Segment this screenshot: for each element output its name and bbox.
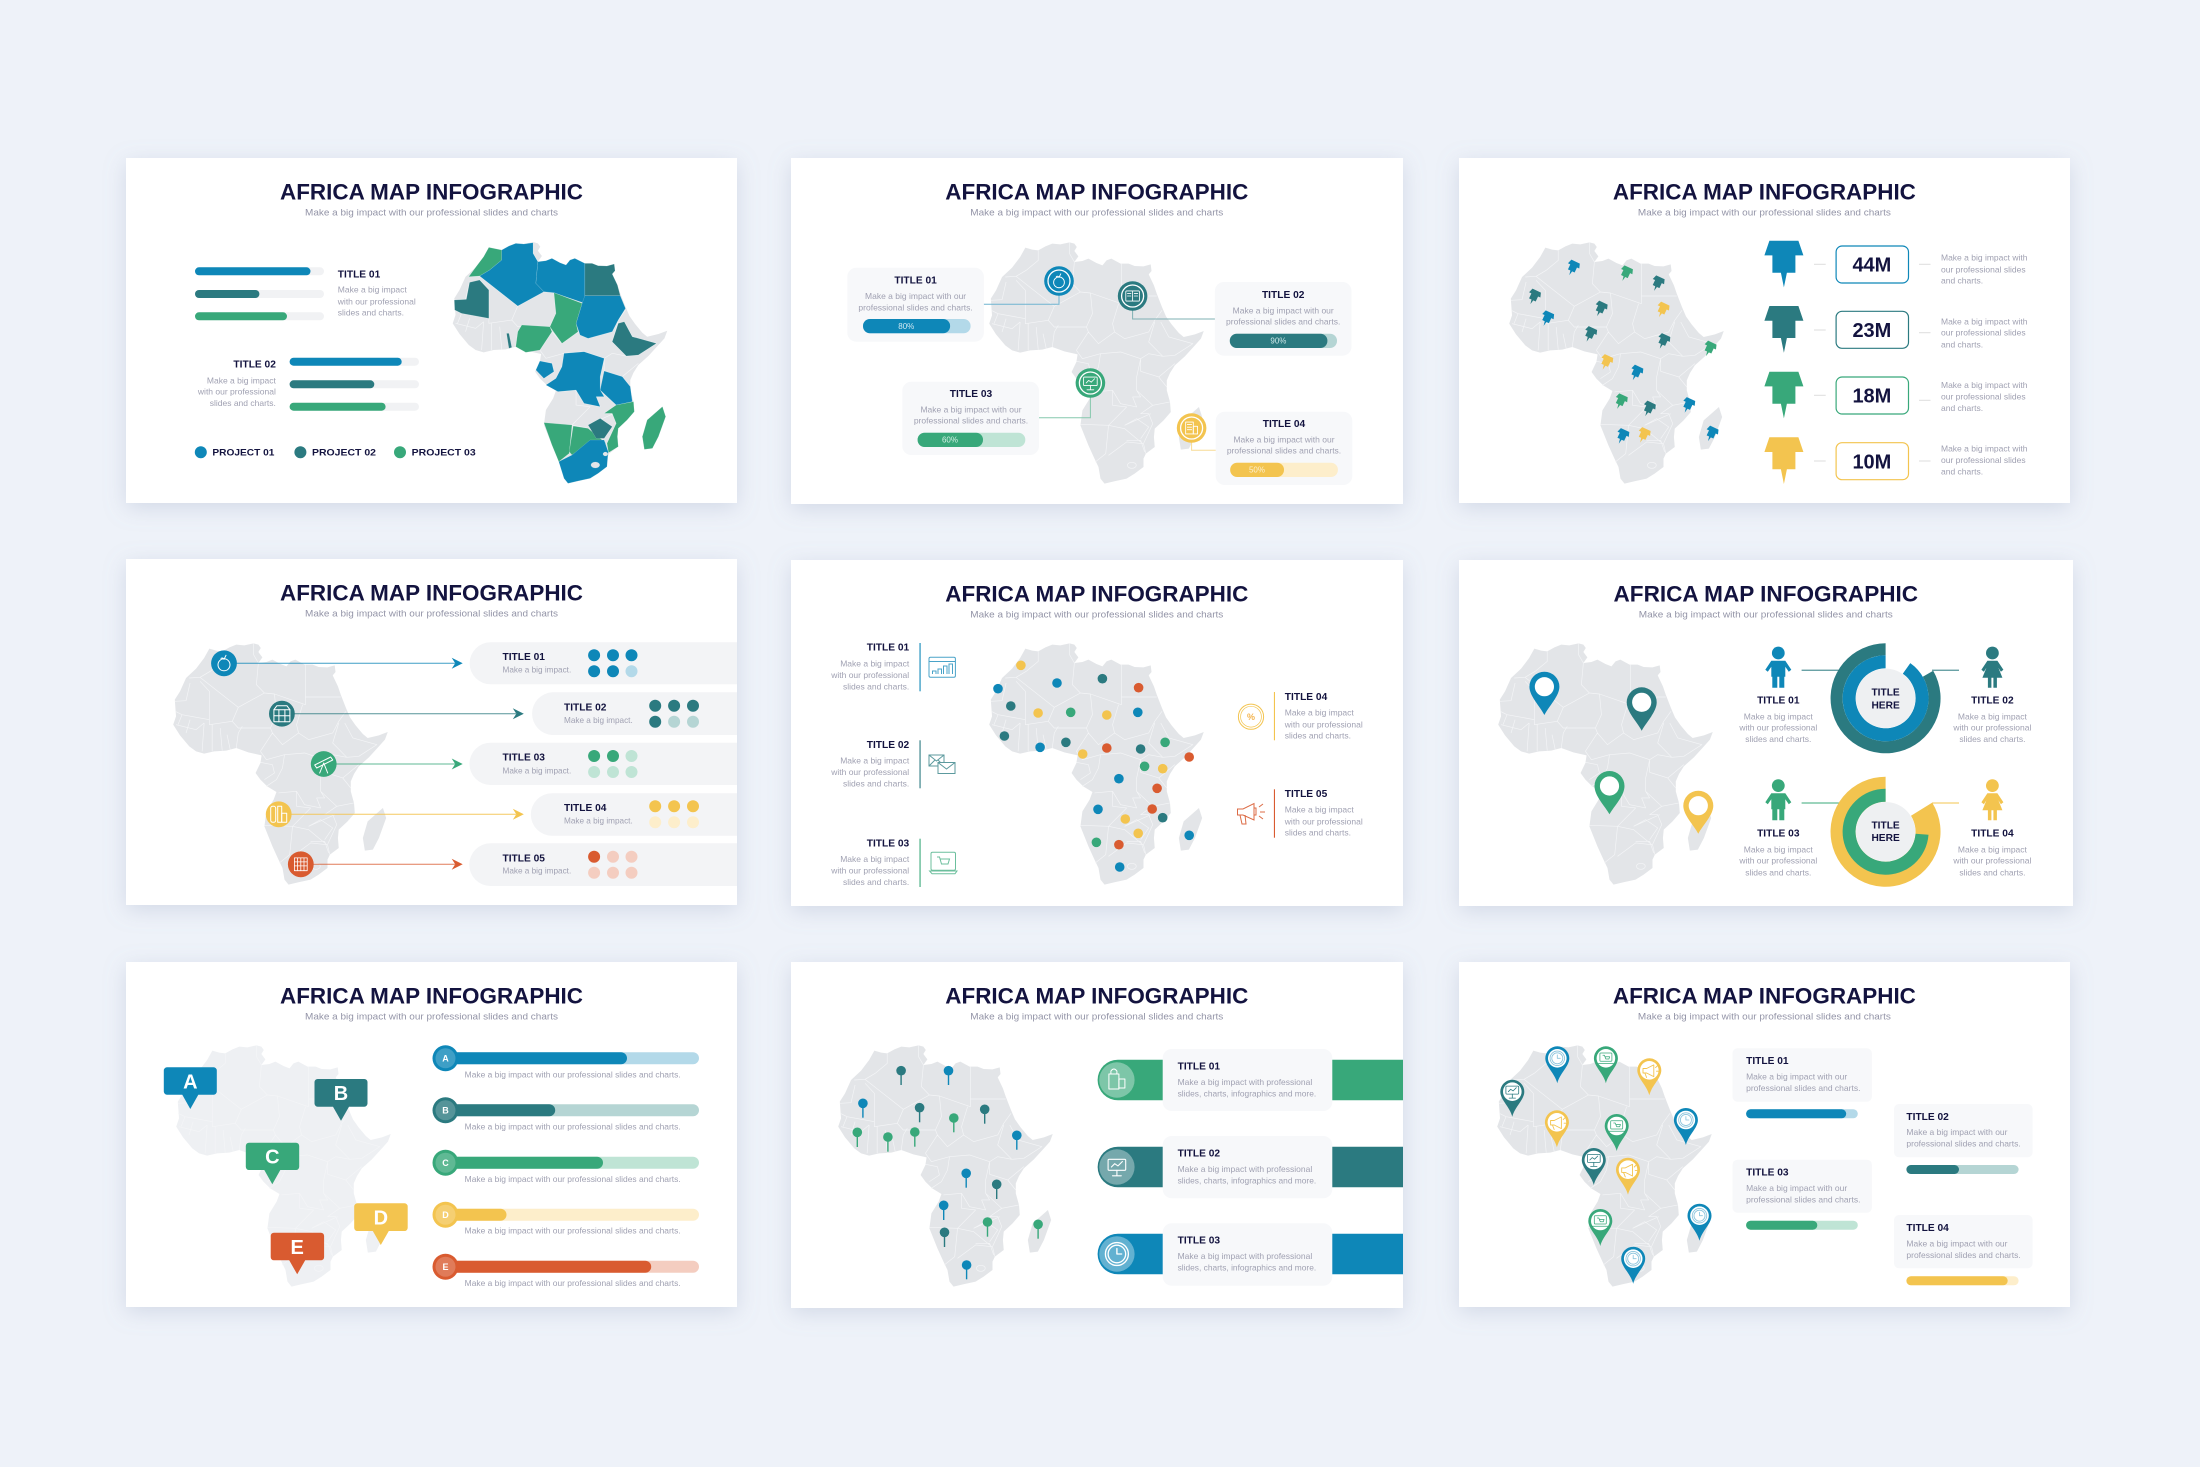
person: title 02: [1952, 647, 2031, 744]
row: 23M: [1764, 306, 2028, 353]
map: [176, 1045, 391, 1287]
bar: B: Make a big impact with our professional slides and charts.: [465, 1122, 681, 1131]
row: 10M: [1764, 437, 2028, 484]
row: 10M: and charts.: [1941, 466, 1983, 476]
band: title 01: Make a big impact with professional: [1178, 1077, 1312, 1087]
person: title 04: [1952, 779, 2031, 877]
note: title 03: slides and charts.: [843, 877, 909, 887]
pill: title 01: [470, 642, 737, 684]
callout: C: [246, 1143, 299, 1184]
card: title 04: professional slides and charts.: [1906, 1250, 2021, 1260]
card: title 02: TITLE 02: [1906, 1112, 1949, 1123]
card: title 03: Make a big impact with our: [1746, 1183, 1847, 1193]
callout: A: [164, 1067, 217, 1109]
note: title 05: with our professional: [1284, 816, 1363, 826]
donut chart: top: [1831, 643, 1941, 753]
person: title 04: Make a big impact: [1958, 844, 2028, 854]
person: title 04: slides and charts.: [1959, 867, 2025, 877]
subheading: Make a big impact with our professional slides and charts: [1638, 1012, 1891, 1023]
text: title 01: TITLE 01: [338, 270, 381, 281]
row: 44M: Make a big impact with: [1941, 253, 2028, 263]
icon: bar chart window: [929, 657, 955, 677]
note: title 02: slides and charts.: [843, 779, 909, 789]
subheading: Make a big impact with our professional slides and charts: [1638, 208, 1891, 218]
person: title 01: Make a big impact: [1744, 711, 1813, 721]
map dots: [993, 660, 1194, 872]
heading: AFRICA MAP INFOGRAPHIC: [1613, 984, 1916, 1009]
heading: AFRICA MAP INFOGRAPHIC: [1613, 180, 1916, 204]
card: title 04: 50%: [1249, 466, 1265, 474]
note: title 03: Make a big impact: [840, 854, 910, 864]
text: title 01: with our professional: [337, 296, 416, 306]
subheading: Make a big impact with our professional slides and charts: [305, 208, 558, 218]
card: title 01: [847, 268, 984, 342]
row: 44M: our professional slides: [1941, 264, 2026, 274]
person: title 03: [1738, 779, 1817, 877]
card: title 03: [1732, 1160, 1872, 1230]
heading: AFRICA MAP INFOGRAPHIC: [280, 180, 583, 204]
person: title 03: with our professional: [1738, 856, 1817, 866]
row: 18M: [1764, 372, 2028, 418]
pill: title 05: Make a big impact.: [502, 867, 571, 876]
marker: apple with connector: [984, 266, 1074, 304]
arrow and icon: abacus: [288, 851, 463, 877]
legend: PROJECT 01: [212, 448, 274, 458]
subheading: Make a big impact with our professional slides and charts: [970, 208, 1223, 218]
callout: B: [314, 1079, 368, 1121]
text: title 02: with our professional: [197, 387, 276, 397]
callout: D: D: [374, 1208, 388, 1230]
arrow and icon: telescope: [311, 751, 463, 777]
note: title 03: TITLE 03: [867, 838, 910, 849]
panel: slide 8, needle pins with banded cards: [791, 962, 1403, 1308]
card: title 04: TITLE 04: [1263, 419, 1306, 430]
text: title 02: slides and charts.: [210, 398, 276, 408]
row: 23M: our professional slides: [1941, 328, 2026, 338]
card: title 04: [1216, 412, 1352, 485]
marker: board with connector: [1039, 368, 1105, 418]
map: [989, 643, 1204, 885]
bar: A: Make a big impact with our professional slides and charts.: [465, 1070, 681, 1079]
pill: title 02: Make a big impact.: [564, 716, 633, 725]
map: [1509, 242, 1724, 484]
subheading: Make a big impact with our professional slides and charts: [1639, 610, 1893, 620]
text: title 01: [337, 270, 416, 318]
row: 18M: our professional slides: [1941, 391, 2026, 401]
donut chart: top: HERE: [1871, 700, 1900, 711]
arrow and icon: box: [269, 701, 524, 727]
row: 44M: [1764, 241, 2028, 287]
pill: title 03: TITLE 03: [502, 753, 545, 764]
map: [989, 242, 1204, 484]
card: title 01: professional slides and charts.: [858, 302, 973, 312]
subheading: Make a big impact with our professional slides and charts: [305, 1012, 558, 1023]
bar: D: D: [442, 1210, 449, 1220]
card: title 01: 80%: [898, 322, 914, 331]
subheading: Make a big impact with our professional slides and charts: [305, 608, 558, 620]
note: title 04: Make a big impact: [1285, 708, 1354, 718]
row: 44M: 44M: [1852, 255, 1891, 277]
band: title 01: TITLE 01: [1178, 1061, 1220, 1072]
pill: title 02: [532, 692, 737, 735]
callout: E: E: [291, 1237, 304, 1259]
person: title 04: TITLE 04: [1971, 829, 2014, 840]
band: title 02: slides, charts, infographics and more.: [1178, 1176, 1316, 1186]
row: 23M: 23M: [1852, 320, 1891, 342]
map: [173, 643, 388, 885]
note: title 02: [830, 740, 921, 789]
legend: [195, 446, 476, 458]
panel: slide 2, callout cards on map: [791, 158, 1403, 504]
panel: slide 1, coloured project map: [126, 158, 737, 503]
bar: D: Make a big impact with our professional slides and charts.: [465, 1227, 681, 1236]
map: [1498, 643, 1713, 885]
panel: slide 9, icon teardrop pins with cards: [1459, 962, 2070, 1307]
person: title 01: slides and charts.: [1745, 734, 1811, 744]
person: title 02: TITLE 02: [1971, 696, 2014, 707]
callout: A: A: [183, 1071, 198, 1093]
card: title 02: Make a big impact with our: [1233, 305, 1334, 315]
marker: book with connector: [1118, 281, 1215, 319]
band: title 02: [1098, 1136, 1403, 1198]
person: title 02: with our professional: [1952, 723, 2031, 733]
map: [1497, 1045, 1712, 1287]
note: title 05: Make a big impact: [1285, 805, 1354, 815]
note: title 04: TITLE 04: [1285, 692, 1328, 703]
card: title 04: [1894, 1215, 2033, 1285]
pill: title 01: TITLE 01: [502, 652, 545, 663]
bar: B: B: [442, 1106, 449, 1116]
person: title 01: [1738, 647, 1817, 744]
bar: E: E: [442, 1262, 449, 1272]
note: title 05: slides and charts.: [1285, 828, 1351, 838]
card: title 02: professional slides and charts.: [1906, 1139, 2021, 1149]
heading: AFRICA MAP INFOGRAPHIC: [945, 180, 1248, 204]
arrow and icon: bottles: [266, 801, 524, 827]
note: title 01: [830, 643, 921, 691]
bar: E: [432, 1254, 699, 1288]
card: title 01: TITLE 01: [894, 275, 937, 286]
note: title 02: Make a big impact: [840, 756, 910, 766]
card: title 02: [1215, 282, 1352, 356]
card: title 04: professional slides and charts.: [1227, 446, 1341, 456]
bar: A: A: [442, 1054, 449, 1064]
card: title 04: TITLE 04: [1906, 1223, 1949, 1234]
band: title 02: TITLE 02: [1178, 1148, 1220, 1159]
bar: E: Make a big impact with our professional slides and charts.: [465, 1279, 681, 1288]
row: 10M: our professional slides: [1941, 455, 2026, 465]
panel: slide 7, lettered callouts with bars: [126, 962, 737, 1307]
legend: PROJECT 02: [312, 448, 376, 458]
row: 18M: and charts.: [1941, 403, 1983, 413]
bars: title 01: [195, 267, 324, 320]
person: title 02: slides and charts.: [1959, 734, 2025, 744]
panel: slide 3, push pins with totals: [1459, 158, 2070, 503]
text: title 02: [197, 360, 277, 408]
note: title 03: with our professional: [830, 865, 909, 875]
card: title 02: professional slides and charts.: [1226, 317, 1340, 327]
map: coloured countries: [453, 242, 667, 483]
card: title 03: TITLE 03: [1746, 1167, 1789, 1178]
map: [838, 1045, 1053, 1287]
bars: title 02: [290, 358, 419, 411]
pill: title 05: [469, 843, 737, 886]
heading: AFRICA MAP INFOGRAPHIC: [280, 984, 583, 1009]
location pin: blue: [1529, 672, 1559, 715]
card: title 04: Make a big impact with our: [1233, 434, 1335, 444]
subheading: Make a big impact with our professional slides and charts: [970, 1012, 1223, 1023]
text: title 01: slides and charts.: [338, 308, 404, 318]
callout: D: [354, 1203, 408, 1245]
text: title 02: Make a big impact: [207, 375, 277, 385]
bar: B: [432, 1097, 699, 1131]
location pin: yellow: [1683, 791, 1713, 834]
note: title 03: [830, 838, 921, 887]
row: 23M: Make a big impact with: [1941, 316, 2028, 326]
band: title 03: slides, charts, infographics and more.: [1178, 1263, 1316, 1273]
card: title 02: 90%: [1270, 336, 1286, 346]
heading: AFRICA MAP INFOGRAPHIC: [280, 580, 583, 605]
bar: D: [432, 1202, 699, 1236]
person: title 01: with our professional: [1738, 723, 1817, 733]
row: 10M: 10M: [1852, 451, 1891, 473]
legend: PROJECT 03: [412, 448, 476, 458]
callout: C: C: [265, 1146, 280, 1168]
note: title 01: Make a big impact: [840, 658, 910, 668]
pill: title 04: TITLE 04: [564, 803, 607, 814]
pill: title 04: [531, 793, 737, 836]
card: title 02: TITLE 02: [1262, 290, 1305, 301]
panel: slide 6, location pins with donut charts: [1459, 560, 2073, 906]
note: title 05: [1274, 789, 1363, 838]
donut chart: bottom: HERE: [1871, 833, 1900, 844]
card: title 03: [902, 382, 1039, 455]
band: title 03: TITLE 03: [1178, 1236, 1220, 1247]
note: title 02: with our professional: [830, 767, 909, 777]
card: title 02: [1894, 1104, 2033, 1174]
person: title 01: TITLE 01: [1757, 696, 1800, 707]
icon: percent circle: %: [1247, 712, 1255, 722]
teardrop pins: [1500, 1046, 1712, 1284]
band: title 01: [1098, 1049, 1403, 1111]
band: title 03: Make a big impact with professional: [1178, 1251, 1312, 1261]
note: title 04: slides and charts.: [1285, 731, 1351, 741]
pill: title 03: [469, 743, 737, 785]
arrow and icon: apple: [211, 650, 463, 676]
donut chart: top: TITLE: [1871, 688, 1900, 699]
bar: C: Make a big impact with our professional slides and charts.: [465, 1175, 681, 1184]
band: title 02: Make a big impact with professional: [1178, 1164, 1312, 1174]
note: title 04: with our professional: [1284, 719, 1363, 729]
card: title 02: Make a big impact with our: [1906, 1127, 2008, 1137]
subheading: Make a big impact with our professional slides and charts: [970, 610, 1223, 620]
donut chart: bottom: [1831, 777, 1941, 887]
pill: title 04: Make a big impact.: [564, 817, 633, 826]
icon: percent circle: [1238, 704, 1264, 729]
location pin: teal: [1627, 687, 1657, 731]
callout: B: B: [334, 1083, 348, 1105]
person: title 02: Make a big impact: [1958, 711, 2028, 721]
marker: document with connector: [1177, 413, 1216, 450]
card: title 03: 60%: [942, 435, 958, 444]
band: title 03: [1098, 1223, 1403, 1286]
bar: A: [432, 1045, 699, 1079]
note: title 04: [1274, 692, 1363, 741]
person: title 03: TITLE 03: [1757, 829, 1800, 840]
text: title 02: TITLE 02: [233, 360, 276, 371]
small pins on map: [1525, 259, 1720, 446]
pill: title 05: TITLE 05: [502, 853, 545, 864]
row: 18M: Make a big impact with: [1941, 380, 2028, 390]
icon: envelopes: [929, 755, 955, 774]
row: 18M: 18M: [1852, 386, 1891, 408]
row: 23M: and charts.: [1941, 339, 1983, 349]
note: title 01: slides and charts.: [843, 681, 909, 691]
bar: C: C: [442, 1158, 449, 1168]
card: title 03: professional slides and charts.: [1746, 1195, 1860, 1205]
bar: C: [432, 1150, 699, 1184]
icon: laptop cart: [930, 852, 957, 874]
donut chart: bottom: TITLE: [1871, 820, 1900, 831]
heading: AFRICA MAP INFOGRAPHIC: [1614, 581, 1918, 606]
card: title 04: Make a big impact with our: [1906, 1239, 2008, 1249]
panel: slide 5, dotted map with five notes: [791, 560, 1403, 906]
note: title 05: TITLE 05: [1285, 789, 1328, 800]
card: title 01: Make a big impact with our: [1746, 1072, 1847, 1082]
heading: AFRICA MAP INFOGRAPHIC: [945, 984, 1248, 1009]
pill: title 02: TITLE 02: [564, 702, 607, 713]
pill: title 01: Make a big impact.: [502, 666, 571, 675]
person: title 03: Make a big impact: [1744, 844, 1813, 854]
row: 10M: Make a big impact with: [1941, 444, 2028, 454]
note: title 01: with our professional: [830, 670, 909, 680]
icon: megaphone: [1238, 804, 1265, 824]
heading: AFRICA MAP INFOGRAPHIC: [945, 581, 1248, 606]
card: title 01: [1732, 1048, 1872, 1118]
card: title 03: professional slides and charts.: [914, 416, 1028, 426]
card: title 01: TITLE 01: [1746, 1056, 1789, 1067]
person: title 03: slides and charts.: [1745, 867, 1811, 877]
person: title 04: with our professional: [1952, 856, 2031, 866]
row: 44M: and charts.: [1941, 276, 1983, 286]
location pin: green: [1594, 771, 1624, 814]
card: title 01: Make a big impact with our: [865, 291, 966, 301]
text: title 01: Make a big impact: [338, 285, 407, 295]
connectors: [1802, 670, 1959, 804]
card: title 03: Make a big impact with our: [920, 404, 1022, 414]
needle pins: [852, 1066, 1043, 1279]
pill: title 03: Make a big impact.: [502, 766, 571, 775]
card: title 03: TITLE 03: [950, 389, 993, 400]
band: title 01: slides, charts, infographics and more.: [1178, 1089, 1316, 1099]
note: title 01: TITLE 01: [867, 643, 910, 654]
note: title 02: TITLE 02: [867, 740, 910, 751]
callout: E: [271, 1233, 324, 1274]
card: title 01: professional slides and charts.: [1746, 1083, 1860, 1093]
panel: slide 4, arrows to rating pills: [126, 559, 737, 905]
